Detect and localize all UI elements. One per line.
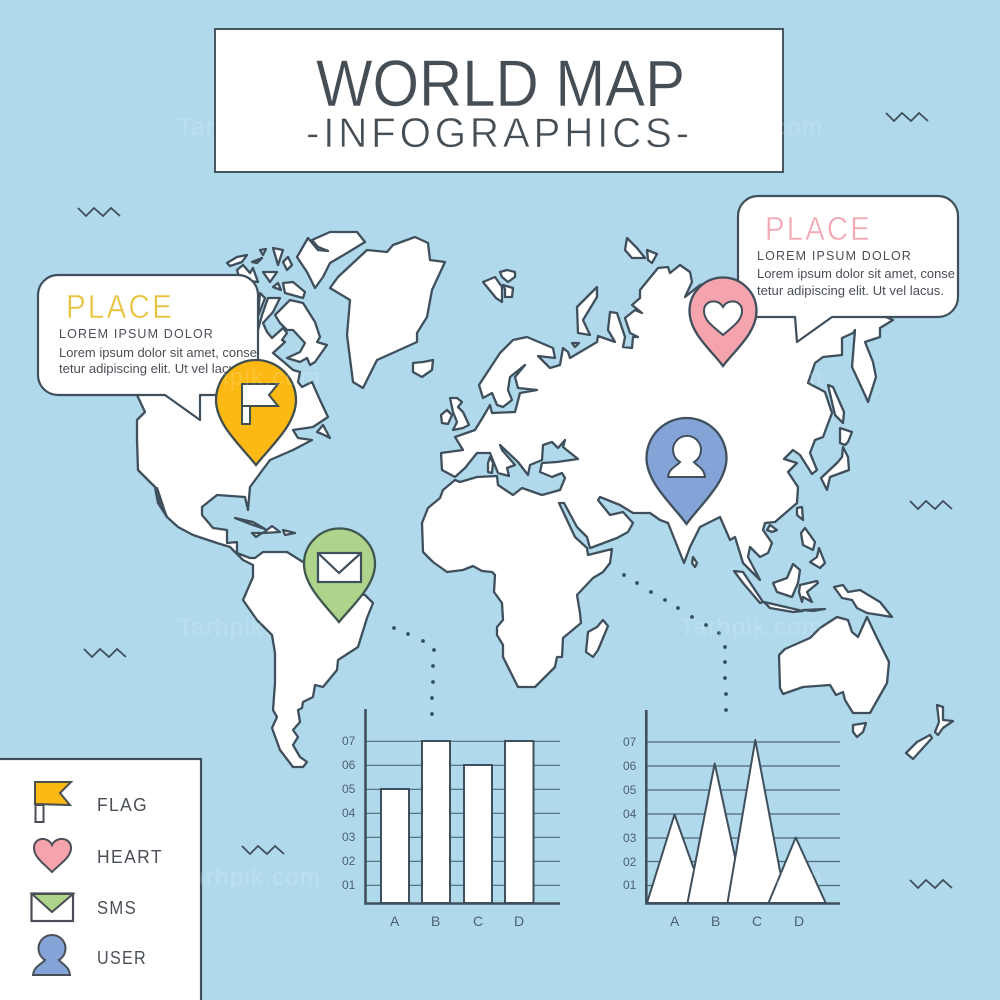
y axis labels: 05 [623, 783, 637, 797]
legend label: user: USER [97, 947, 147, 968]
watermarks: Tarhpik.com [680, 364, 822, 391]
pin: heart pink [690, 278, 756, 366]
axes [366, 709, 560, 904]
icon: flag [35, 782, 71, 822]
y axis labels: 01 [623, 878, 637, 892]
y axis labels: 02 [342, 854, 356, 868]
x axis labels [670, 913, 804, 929]
callout subheading: LOREM IPSUM DOLOR [757, 248, 912, 263]
triangle B [688, 764, 745, 903]
callout heading: PLACE [66, 288, 174, 325]
x axis labels: A [670, 913, 680, 929]
continent: Australia [779, 617, 889, 713]
y axis labels: 04 [342, 806, 356, 820]
y axis labels: 07 [623, 735, 637, 749]
y axis labels: 05 [342, 782, 356, 796]
y axis labels: 01 [342, 878, 356, 892]
callout: right place [738, 196, 958, 342]
watermarks: Tarhpik.com [178, 614, 320, 641]
islands of the Caribbean [235, 518, 295, 537]
watermarks: Tarhpik.com [680, 114, 822, 141]
islands of Asia [692, 385, 892, 617]
legend label: flag: FLAG [97, 794, 148, 815]
bar B [422, 741, 450, 903]
pin: flag yellow [216, 360, 296, 465]
y axis labels: 04 [623, 807, 637, 821]
y axis labels [623, 735, 637, 892]
y axis labels: 06 [623, 759, 637, 773]
x axis labels: A [390, 913, 400, 929]
subtitle: infographics: -INFOGRAPHICS- [306, 109, 693, 156]
pin: sms green [304, 528, 375, 622]
dotted connector: right chart [622, 573, 728, 712]
y axis labels: 06 [342, 758, 356, 772]
callout: left place [38, 275, 258, 420]
world map [137, 232, 953, 767]
x axis labels: B [711, 913, 720, 929]
continent: North and South America [137, 298, 373, 767]
continent: Greenland [330, 237, 445, 388]
bar C [464, 765, 492, 903]
watermarks: Tarhpik.com [178, 364, 320, 391]
Gulf of California [157, 488, 167, 517]
islands of Oceania and Africa [586, 620, 953, 759]
y axis labels: 07 [342, 734, 356, 748]
watermarks: Tarhpik.com [680, 864, 822, 891]
legend label: heart: HEART [97, 846, 163, 867]
dotted connector: left chart [392, 626, 436, 716]
callout heading: PLACE [765, 210, 872, 247]
x axis labels: C [473, 913, 483, 929]
callout body line 2: tetur adipiscing elit. Ut vel lacus. [757, 284, 944, 298]
x axis labels: C [752, 913, 762, 929]
icon: envelope [32, 894, 73, 921]
callout body line 1: Lorem ipsum dolor sit amet, conse [757, 267, 955, 281]
title: world map: WORLD MAP [316, 46, 685, 120]
watermarks: Tarhpik.com [680, 614, 822, 641]
y axis labels: 03 [623, 831, 637, 845]
bar chart [342, 709, 560, 929]
bar D [505, 741, 534, 903]
icon: user [33, 935, 70, 975]
y axis labels [342, 734, 356, 892]
title box [215, 29, 783, 172]
triangle C [728, 740, 786, 903]
callout subheading: LOREM IPSUM DOLOR [59, 326, 214, 341]
x axis labels: B [431, 913, 440, 929]
callout body line 1: Lorem ipsum dolor sit amet, conse [59, 346, 257, 360]
pin: user blue [646, 418, 726, 524]
axes [646, 710, 840, 904]
triangle chart [623, 710, 840, 929]
arctic islands of Canada [227, 232, 365, 438]
x axis labels: D [514, 913, 524, 929]
legend label: sms: SMS [97, 897, 137, 918]
watermarks [178, 114, 822, 891]
icon: heart [34, 839, 71, 872]
x axis labels: D [794, 913, 804, 929]
watermarks: Tarhpik.com [178, 114, 320, 141]
continent: Eurasia and Africa [422, 265, 893, 687]
watermarks: Tarhpik.com [178, 864, 320, 891]
decorative squiggles [78, 113, 952, 888]
bar A [381, 789, 409, 903]
legend panel [0, 759, 201, 1000]
y axis labels: 02 [623, 855, 637, 869]
x axis labels [390, 913, 524, 929]
callout body line 2: tetur adipiscing elit. Ut vel lacus. [59, 362, 246, 376]
triangle A [647, 814, 706, 903]
islands of Europe and the Arctic [413, 238, 657, 473]
triangle D [768, 838, 826, 903]
y axis labels: 03 [342, 830, 356, 844]
